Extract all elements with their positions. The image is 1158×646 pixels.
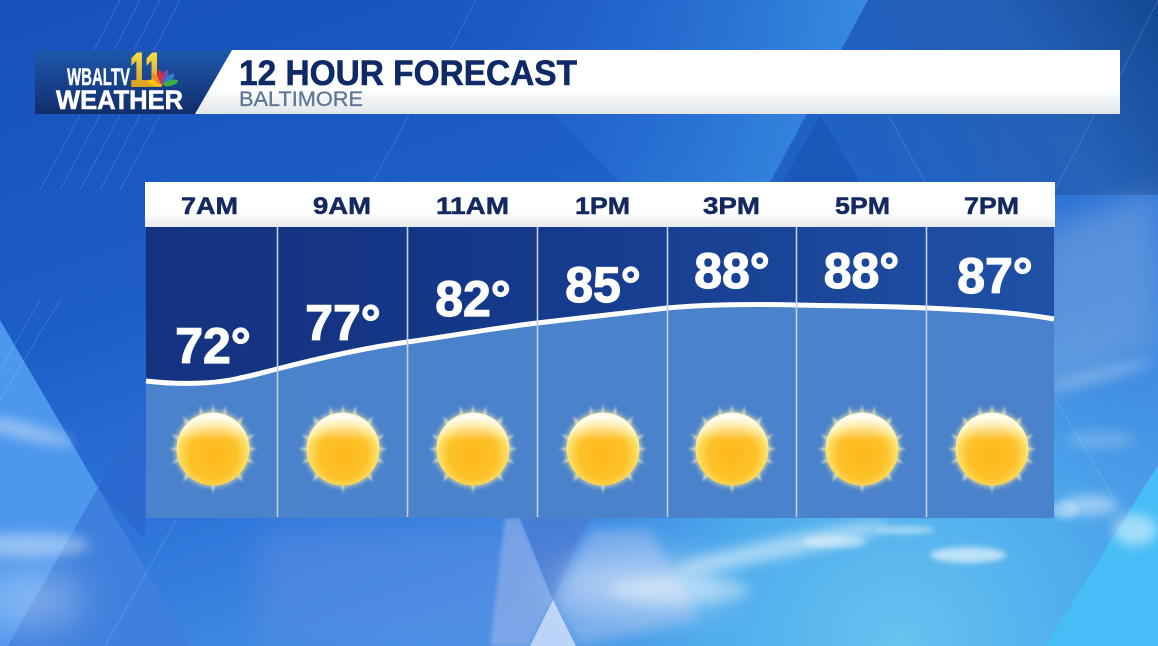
temperatures: 77°	[305, 295, 381, 351]
logo: WEATHER wordmark: WEATHER	[56, 85, 183, 115]
temperature curve line	[146, 304, 1054, 383]
column dividers	[278, 227, 926, 517]
clouds	[0, 357, 1157, 604]
hour labels: 11AM	[436, 193, 509, 220]
temperatures	[175, 243, 1033, 374]
dark upper temperature band	[146, 227, 1054, 387]
hour labels	[181, 193, 1019, 220]
forecast table panel	[145, 182, 1055, 518]
hour labels: 1PM	[575, 193, 630, 220]
hour labels: 9AM	[313, 193, 371, 220]
logo: NBC peacock icon	[147, 69, 179, 88]
temperatures: 88°	[824, 243, 899, 299]
temperatures: 87°	[957, 248, 1033, 304]
subtitle: BALTIMORE	[239, 88, 363, 111]
temperatures: 85°	[565, 257, 641, 313]
title: 12 HOUR FORECAST	[239, 54, 577, 93]
hour header row	[145, 182, 1055, 227]
hour labels: 5PM	[835, 193, 890, 220]
logo: number 11: 11	[130, 43, 162, 96]
logo: WBALTV wordmark: WBALTV	[67, 64, 130, 91]
hour labels: 3PM	[703, 193, 760, 220]
lighter lower area	[146, 304, 1054, 518]
title bar	[195, 50, 1120, 114]
hour labels: 7AM	[181, 193, 238, 220]
temperatures: 88°	[694, 243, 770, 299]
temperatures: 82°	[435, 271, 511, 327]
temperatures: 72°	[175, 318, 251, 374]
logo panel: WBAL TV 11 Weather	[35, 43, 232, 115]
hour labels: 7PM	[964, 193, 1019, 220]
header banner	[35, 43, 1120, 115]
sun icons	[168, 404, 1037, 494]
